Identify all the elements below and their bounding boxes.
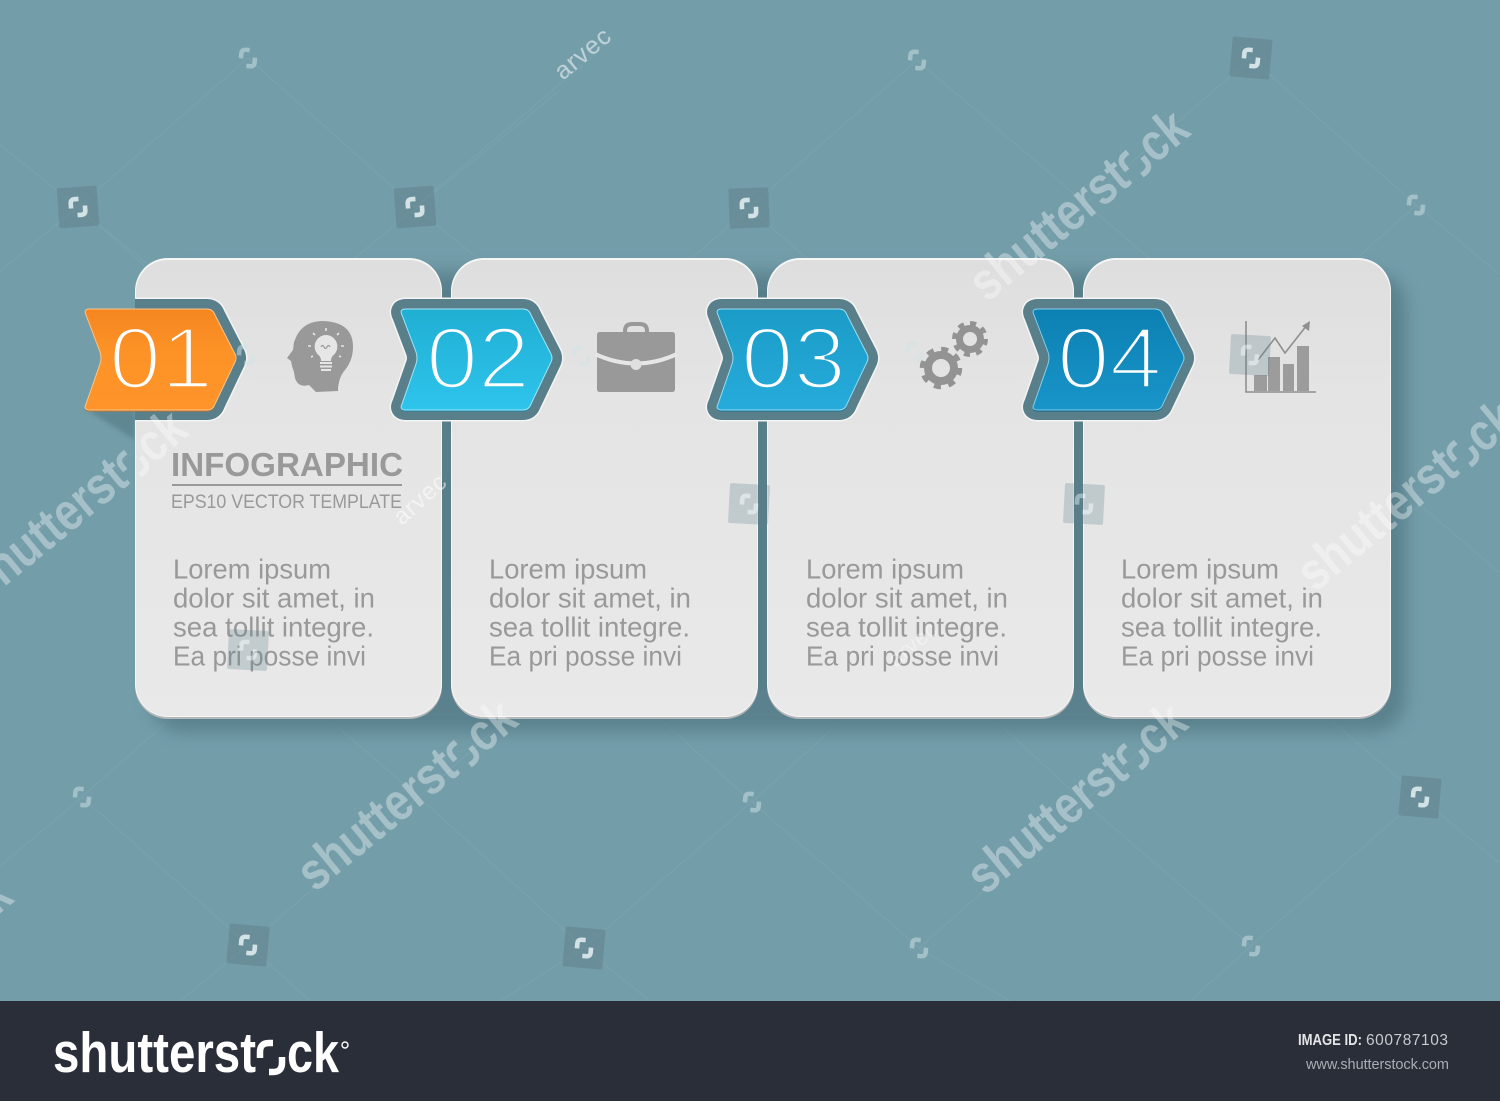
text block: card 2: sea tollit integre. — [489, 612, 690, 642]
watermark: arvec top: arvec — [549, 22, 617, 86]
text block: card 3: Lorem ipsum — [806, 554, 964, 584]
icon: head with light bulb — [287, 321, 353, 392]
watermark: shutterstock lower right: shutterst — [955, 740, 1138, 905]
footer bar — [0, 1001, 1500, 1101]
icon: bar chart with rising arrow — [1246, 321, 1316, 392]
footer image id: 600787103 — [1366, 1032, 1448, 1049]
watermark: shutterstock far right: shutterst — [1285, 437, 1468, 602]
icon: briefcase — [595, 324, 677, 392]
watermark: arvec on card: arvec — [388, 469, 452, 530]
arrow badge 02: 02 — [426, 310, 530, 407]
footer image id: IMAGE ID: — [1298, 1032, 1362, 1049]
footer image id: www.shutterstock.com — [1305, 1057, 1449, 1073]
watermark: shutterstock centre-left: shutterst — [285, 737, 468, 902]
panel: card 2 — [451, 258, 758, 719]
text block: card 4: sea tollit integre. — [1121, 612, 1322, 642]
arrow badge 04: 04 — [1057, 310, 1162, 407]
text block: card 2 — [489, 554, 691, 672]
footer logo: ck — [287, 1021, 339, 1085]
text block: card 2: Ea pri posse invi — [489, 640, 682, 672]
panel: card 3 — [767, 258, 1074, 719]
watermark: shutterstock lower right: ck — [1123, 690, 1198, 767]
text block: card 3: Ea pri posse invi — [806, 640, 999, 672]
card drop shadows — [87, 272, 1406, 732]
arrow badge 04 — [1033, 309, 1184, 412]
heading: infographic — [171, 447, 403, 513]
watermark: shutterstock far left: ck — [123, 397, 198, 474]
text block: card 4 — [1121, 554, 1323, 672]
arrow badge 03: 03 — [741, 310, 846, 407]
icon: gears — [922, 324, 986, 386]
heading: infographic: EPS10 VECTOR TEMPLATE — [171, 492, 402, 513]
arrow badge 01: 01 — [109, 310, 213, 407]
text block: card 4: Ea pri posse invi — [1121, 640, 1314, 672]
watermark: shutterstock centre-left: ck — [453, 687, 528, 764]
text block: card 1: Lorem ipsum — [173, 554, 331, 584]
watermark: arvec lower: arvec — [883, 617, 942, 672]
watermark marks — [57, 36, 1442, 970]
footer logo: shutterst — [53, 1021, 256, 1085]
text block: card 3 — [806, 554, 1008, 672]
text block: card 1: sea tollit integre. — [173, 612, 374, 642]
text block: card 2: Lorem ipsum — [489, 554, 647, 584]
text block: card 2: dolor sit amet, in — [489, 582, 691, 614]
text block: card 1: dolor sit amet, in — [173, 582, 375, 614]
text block: card 3: dolor sit amet, in — [806, 582, 1008, 614]
text block: card 1 — [173, 554, 375, 672]
text block: card 4: dolor sit amet, in — [1121, 582, 1323, 614]
heading: infographic: INFOGRAPHIC — [171, 447, 403, 484]
arrow badge 03 — [717, 309, 868, 412]
text block: card 3: sea tollit integre. — [806, 612, 1007, 642]
arrow badge 01 — [85, 309, 236, 412]
footer image id — [1298, 1032, 1449, 1073]
panel: card 1 — [135, 258, 442, 719]
watermark: shutterstock top right: ck — [1125, 97, 1200, 174]
text block: card 1: Ea pri posse invi — [173, 640, 366, 672]
arrow badge 02 — [401, 309, 552, 412]
text block: card 4: Lorem ipsum — [1121, 554, 1279, 584]
panel: card 4 — [1083, 258, 1391, 719]
watermark: shutterstock top right: shutterst — [957, 147, 1140, 312]
